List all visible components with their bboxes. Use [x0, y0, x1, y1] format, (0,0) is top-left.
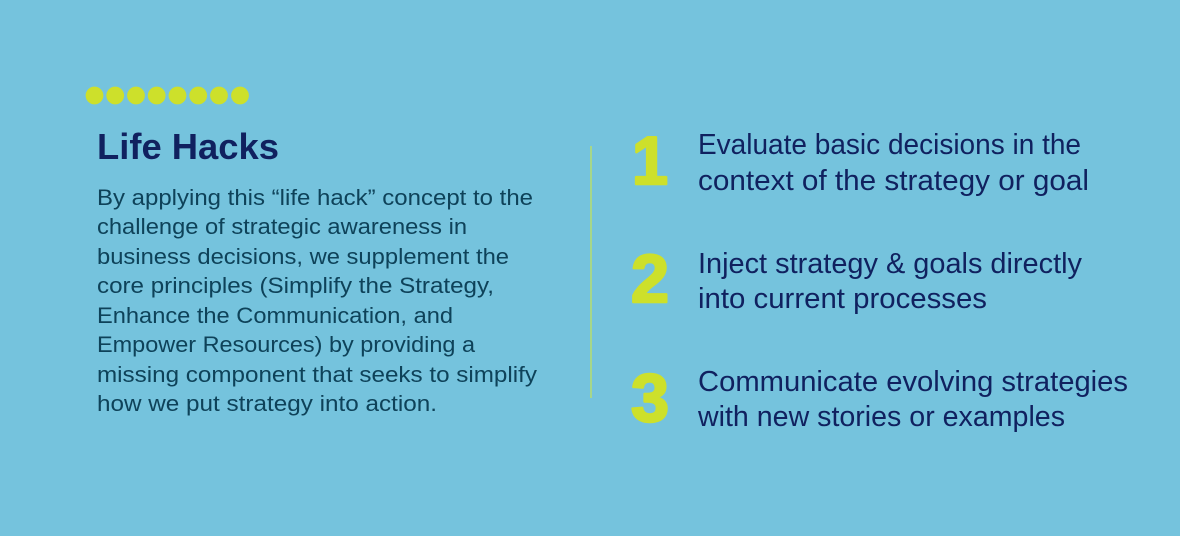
divider	[590, 146, 592, 398]
body paragraph: challenge of strategic awareness in	[97, 214, 467, 239]
step 3 text: Communicate evolving strategies	[698, 366, 1128, 398]
step 2 text: into current processes	[698, 283, 987, 315]
title: Life Hacks	[97, 126, 279, 167]
step 1 text: Evaluate basic decisions in the	[698, 129, 1081, 161]
number 1: 1	[632, 123, 668, 199]
body paragraph: Empower Resources) by providing a	[97, 332, 475, 357]
step 1 text	[698, 129, 1089, 197]
body paragraph: missing component that seeks to simplify	[97, 362, 538, 387]
step 2	[631, 241, 1083, 317]
number 3: 3	[631, 360, 669, 436]
number 2: 2	[631, 241, 669, 317]
step 3 text: with new stories or examples	[697, 401, 1065, 433]
body paragraph: By applying this “life hack” concept to the	[97, 185, 533, 210]
body paragraph: business decisions, we supplement the	[97, 244, 509, 269]
step 2 text: Inject strategy & goals directly	[698, 248, 1083, 280]
body paragraph: how we put strategy into action.	[97, 391, 437, 416]
body paragraph: Enhance the Communication, and	[97, 303, 453, 328]
body paragraph: core principles (Simplify the Strategy,	[97, 273, 494, 298]
step 3	[631, 360, 1128, 436]
step 1	[632, 123, 1089, 199]
body paragraph	[97, 185, 538, 416]
step 3 text	[697, 366, 1128, 433]
step 1 text: context of the strategy or goal	[698, 165, 1089, 197]
step 2 text	[698, 248, 1083, 315]
icon: row of dots	[86, 87, 249, 104]
